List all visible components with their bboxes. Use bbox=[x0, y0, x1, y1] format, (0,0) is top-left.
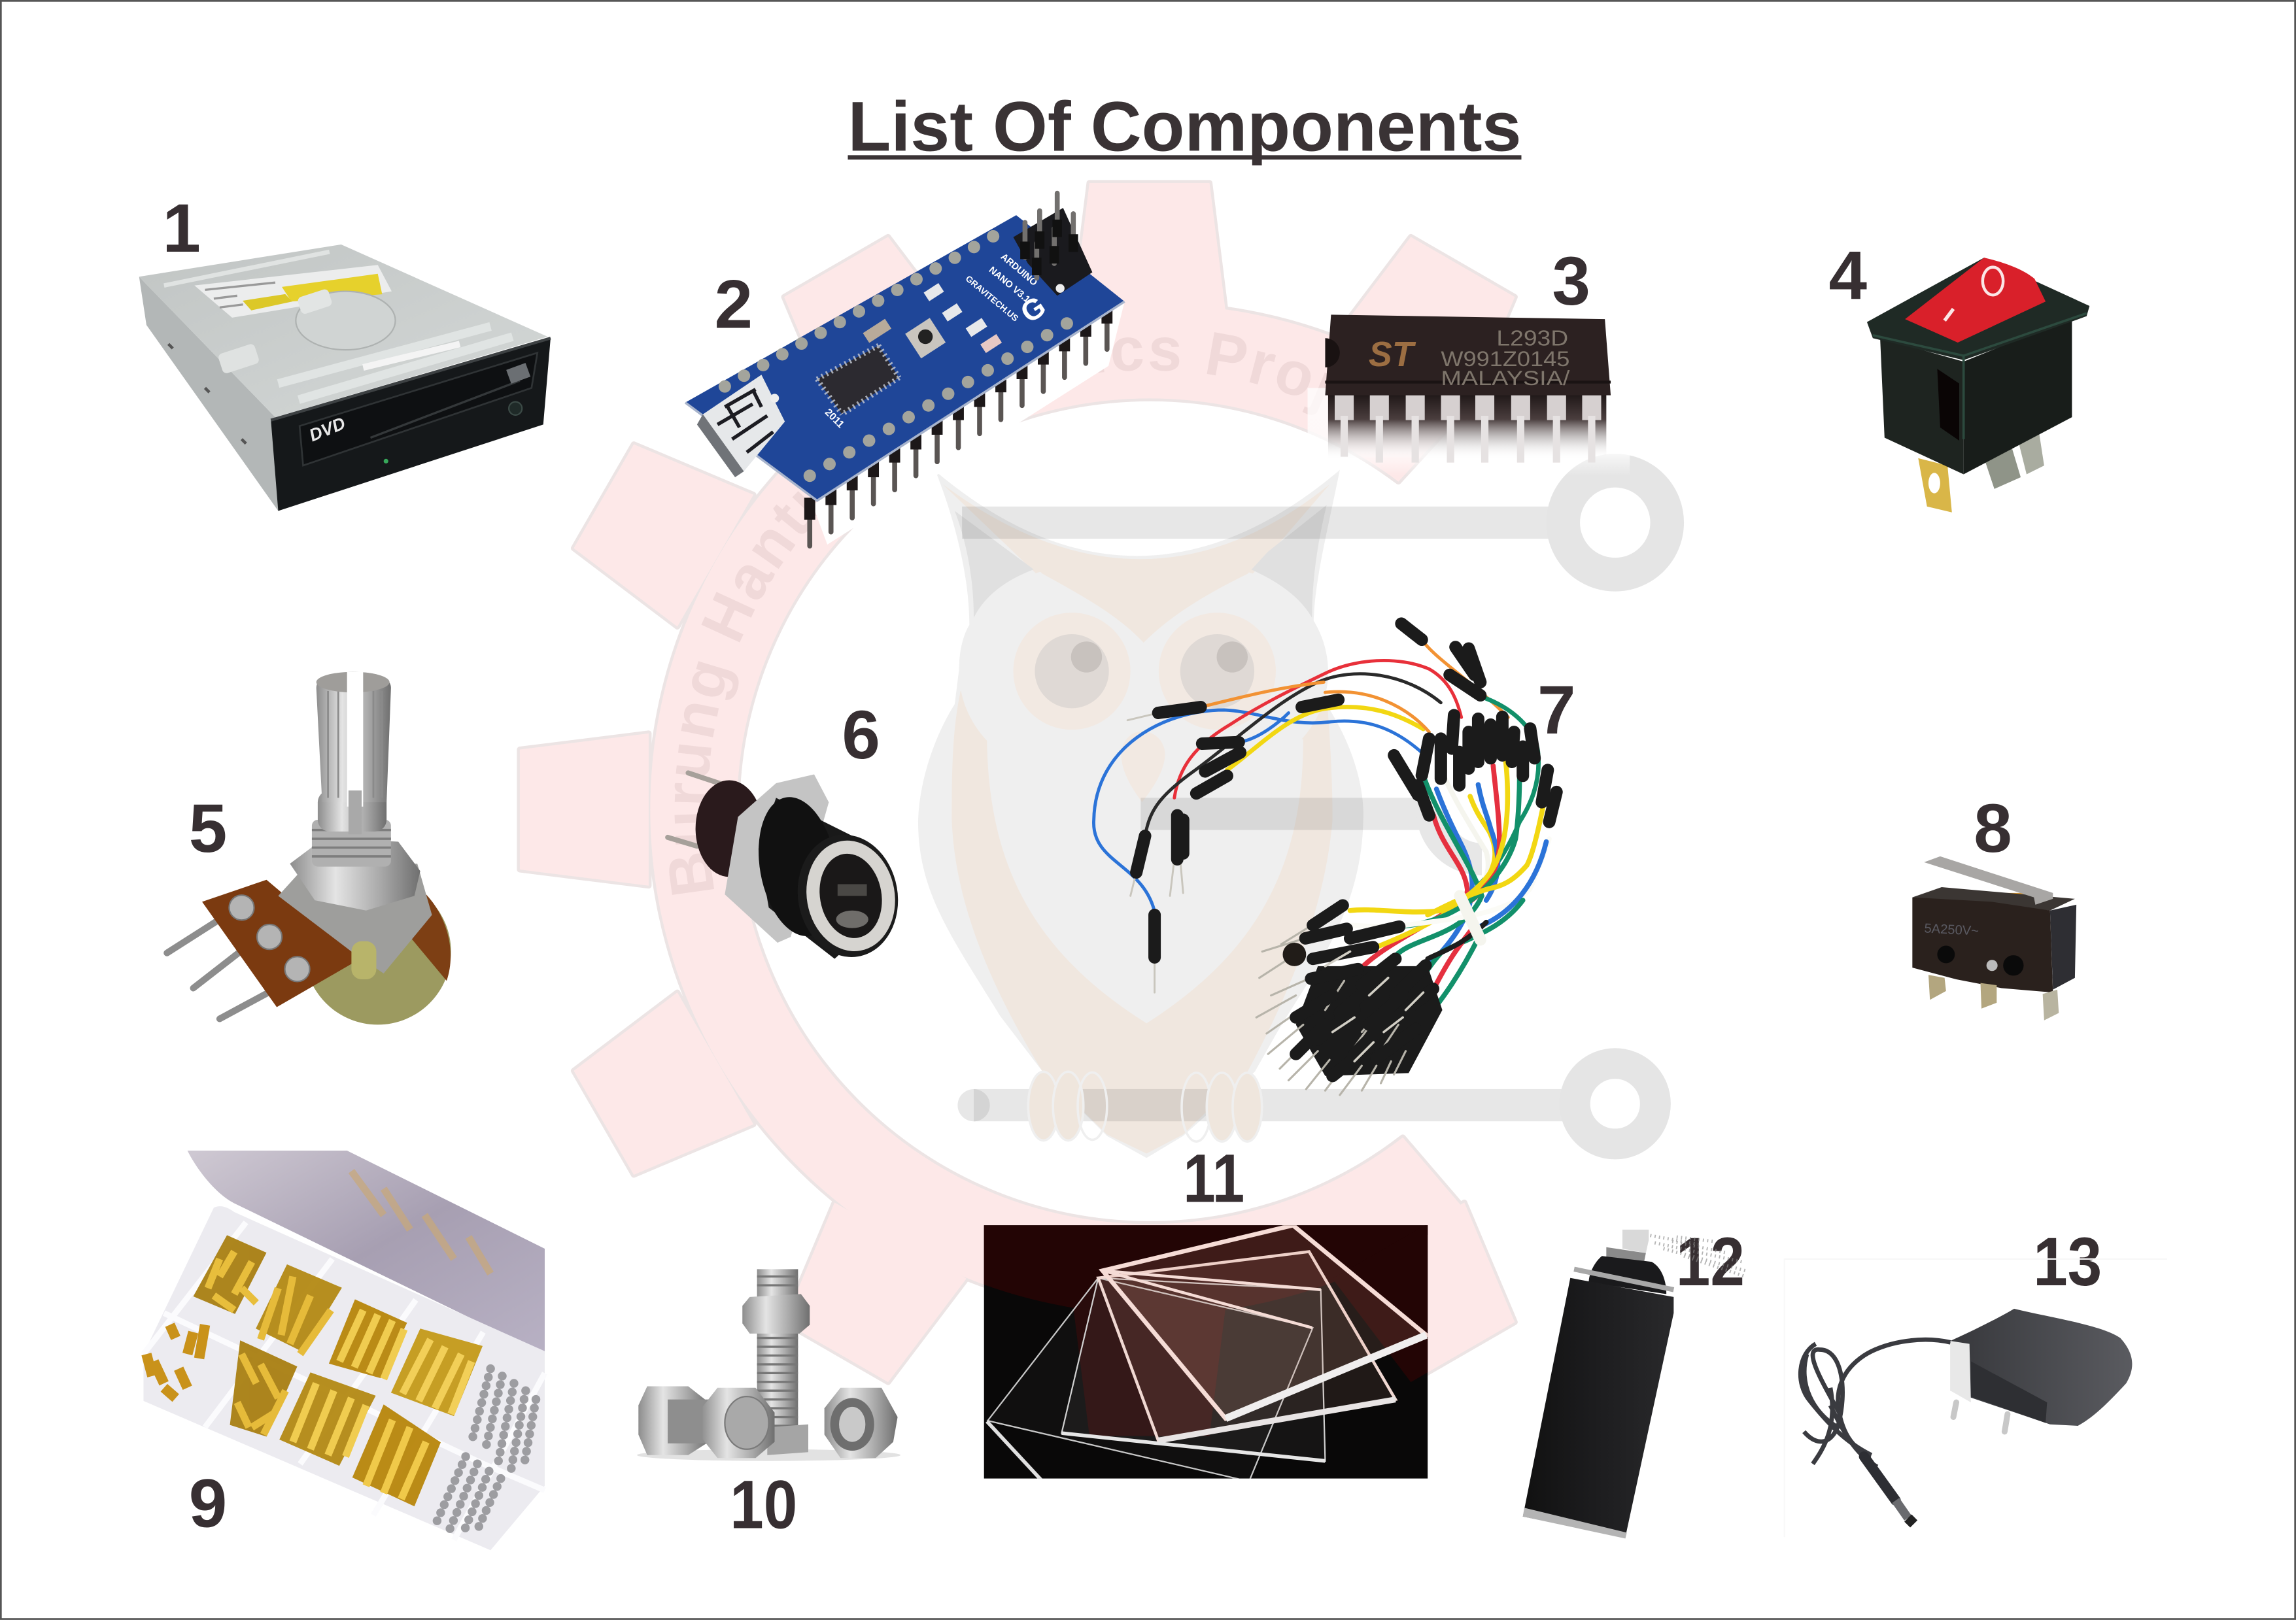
component 5: potentiometer bbox=[167, 672, 451, 1024]
component 2: Arduino Nano board: G bbox=[1015, 290, 1052, 329]
number 7: 7 bbox=[1537, 672, 1575, 749]
watermark: owl body bbox=[918, 470, 1363, 1158]
component 8: micro switch: 5A250V~ bbox=[1924, 921, 1979, 939]
number 12: 12 bbox=[1676, 1224, 1745, 1300]
number 5: 5 bbox=[189, 790, 227, 867]
component 3: L293D IC: L293D bbox=[1496, 326, 1568, 350]
component 12: spray can bbox=[1523, 1230, 1745, 1538]
component 7: jumper wires bbox=[1093, 624, 1556, 1095]
component 3: L293D IC: MALAYSIA/ bbox=[1441, 367, 1570, 390]
component 8: micro switch bbox=[1912, 856, 2076, 1021]
component 10: nuts and bolts bbox=[637, 1269, 900, 1461]
watermark: perch bars and rings bbox=[957, 471, 1667, 1144]
number 6: 6 bbox=[842, 697, 880, 773]
number 2: 2 bbox=[715, 267, 753, 343]
component 2: Arduino Nano board: 2011 bbox=[823, 407, 846, 431]
component 2: Arduino Nano board: GRAVITECH.US bbox=[964, 274, 1020, 324]
number 10: 10 bbox=[730, 1467, 797, 1544]
component 2: Arduino Nano board: NANO V3.1 bbox=[987, 265, 1032, 305]
component 11: acrylic sheets photo bbox=[984, 1225, 1428, 1479]
component 1: DVD drive bbox=[139, 245, 551, 511]
number 3: 3 bbox=[1552, 243, 1590, 320]
watermark: owl toes bbox=[1028, 1072, 1262, 1141]
component 1: DVD drive: DVD bbox=[307, 413, 348, 445]
number 9: 9 bbox=[189, 1465, 227, 1542]
number 4: 4 bbox=[1829, 237, 1867, 314]
component 2: Arduino Nano board bbox=[685, 194, 1125, 546]
number 8: 8 bbox=[1974, 790, 2012, 867]
number 11: 11 bbox=[1183, 1140, 1244, 1217]
number 1: 1 bbox=[162, 190, 201, 267]
component 9: spacer assortment box bbox=[143, 1151, 545, 1550]
number 13: 13 bbox=[2033, 1224, 2102, 1300]
component 3: L293D IC bbox=[1308, 314, 1630, 476]
component 3: L293D IC: ST bbox=[1369, 335, 1416, 374]
component 13: power adapter bbox=[1785, 1259, 2167, 1537]
component 4: rocker switch bbox=[1867, 258, 2089, 513]
component 6: DC jack bbox=[668, 773, 908, 965]
watermark: gear logo bbox=[520, 183, 1529, 1436]
component 3: L293D IC: W991Z0145 bbox=[1441, 347, 1569, 371]
title: List Of Components bbox=[848, 88, 1521, 166]
component 2: Arduino Nano board: ARDUINO bbox=[999, 252, 1039, 288]
